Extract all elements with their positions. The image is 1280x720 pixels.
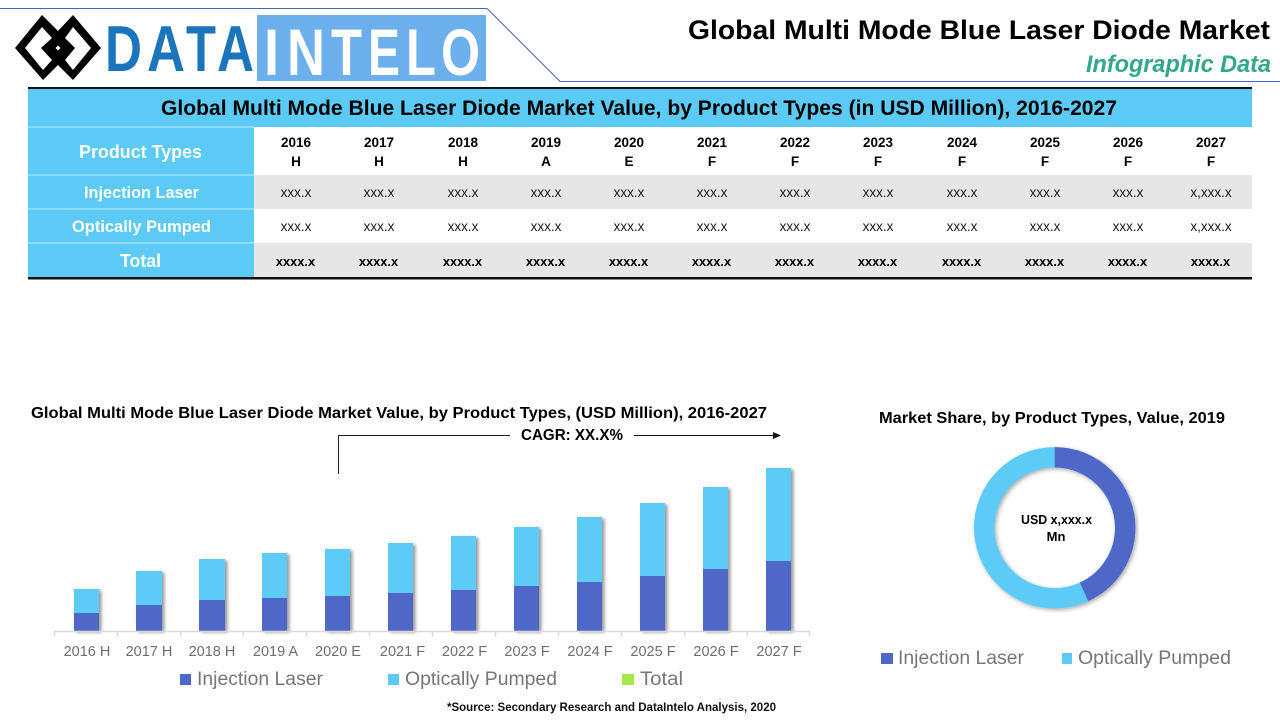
year header row: A [541, 154, 551, 169]
row label column [28, 126, 254, 278]
row values: Injection Laser: xxx.x [1030, 185, 1061, 200]
logo [15, 12, 486, 89]
year header row: 2027 [1196, 135, 1226, 150]
arrow: CAGR [634, 432, 781, 439]
row values: Total: xxxx.x [443, 254, 483, 269]
bar 2020 E [325, 549, 350, 631]
x axis labels: 2019 A [253, 644, 298, 660]
bar 2023 F [514, 527, 539, 631]
donut legend: Injection Laser [898, 648, 1025, 669]
bar 2019 A [262, 553, 287, 631]
bar 2018 H [199, 559, 225, 631]
logo word: INTELO: O [441, 15, 480, 89]
row values: Total: xxxx.x [609, 254, 649, 269]
row values: Total: xxxx.x [1191, 254, 1231, 269]
year header row: H [374, 154, 384, 169]
year header row: 2025 [1030, 135, 1061, 150]
bar chart legend: Optically Pumped [405, 669, 557, 690]
year header row: H [291, 154, 301, 169]
row values: Injection Laser: xxx.x [614, 185, 645, 200]
year header row: F [791, 154, 799, 169]
year header row: F [1041, 154, 1049, 169]
year header row: F [874, 154, 882, 169]
row values: Total: xxxx.x [1025, 254, 1065, 269]
row values: Total [276, 254, 1231, 269]
logo word: DATA [105, 12, 254, 85]
row values: Total: xxxx.x [359, 254, 399, 269]
donut legend: Optically Pumped [1078, 648, 1231, 669]
title: Global Multi Mode Blue Laser Diode Market [688, 15, 1270, 45]
row values: Optically Pumped: xxx.x [1030, 219, 1061, 234]
x axis labels: 2018 H [189, 644, 235, 660]
x axis labels: 2025 F [630, 644, 676, 660]
row values: Optically Pumped: xxx.x [614, 219, 645, 234]
logo box [257, 15, 486, 81]
year header row: 2026 [1113, 135, 1144, 150]
logo word: INTELO: T [331, 15, 362, 89]
year header row: 2022 [780, 135, 810, 150]
logo word: DATA: D [105, 12, 142, 85]
row label column: Injection Laser [84, 184, 200, 202]
x axis labels: 2016 H [64, 644, 110, 660]
logo word: INTELO: N [287, 15, 325, 89]
row values: Total: xxxx.x [692, 254, 732, 269]
subtitle: Infographic Data [1086, 51, 1271, 78]
row values: Optically Pumped: xxx.x [531, 219, 562, 234]
row values: Optically Pumped: xxx.x [863, 219, 894, 234]
row values: Injection Laser: xxx.x [531, 185, 562, 200]
year header row: 2017 [364, 135, 394, 150]
row values: Injection Laser: xxx.x [448, 185, 479, 200]
row label column: Product Types [79, 141, 202, 162]
row values: Total: xxxx.x [276, 254, 316, 269]
year header row: 2018 [448, 135, 479, 150]
source note: *Source: Secondary Research and DataIntelo Analysis, 2020 [447, 702, 776, 714]
row values: Total: xxxx.x [775, 254, 815, 269]
x axis labels: 2023 F [504, 644, 550, 660]
year header row: F [1207, 154, 1215, 169]
bar 2026 F [703, 487, 728, 631]
year header row: F [958, 154, 966, 169]
row values: Total: xxxx.x [858, 254, 898, 269]
table title: Global Multi Mode Blue Laser Diode Market Value, by Product Types (in USD Million), 2016-2027 [161, 96, 1117, 120]
row values: Total: xxxx.x [526, 254, 566, 269]
row values: Injection Laser: xxx.x [780, 185, 811, 200]
row values: Optically Pumped: xxx.x [780, 219, 811, 234]
row values: Total: xxxx.x [942, 254, 982, 269]
year header row [281, 135, 1226, 169]
year header row: H [458, 154, 468, 169]
x axis labels: 2021 F [380, 644, 425, 660]
donut ring [984, 457, 1125, 598]
logo word: INTELO [264, 15, 480, 89]
year header row: E [624, 154, 634, 169]
row values: Injection Laser: xxx.x [947, 185, 978, 200]
row values: Optically Pumped: xxx.x [364, 219, 395, 234]
row label column: Total [120, 250, 161, 271]
row values: Optically Pumped: xxx.x [281, 219, 312, 234]
CAGR callout [338, 427, 781, 474]
CAGR elbow line [338, 436, 510, 474]
icon: logo diamonds [15, 15, 101, 80]
row values: Injection Laser: xxx.x [1113, 185, 1144, 200]
table title band [28, 89, 1252, 127]
row values: Injection Laser: xxx.x [697, 185, 728, 200]
row values: Total: xxxx.x [1108, 254, 1148, 269]
x axis labels: 2026 F [693, 644, 739, 660]
row label column: Optically Pumped [72, 218, 211, 236]
donut centre value: Mn [1047, 529, 1065, 544]
donut legend [881, 648, 1231, 669]
bar 2016 H [74, 589, 99, 631]
x axis labels [64, 644, 802, 660]
donut chart [984, 457, 1125, 598]
year header row: 2019 [531, 135, 561, 150]
row values: Injection Laser [281, 185, 1232, 200]
table top rule [28, 87, 1252, 90]
bar 2027 F [766, 468, 791, 631]
row values: Optically Pumped: xxx.x [448, 219, 479, 234]
x axis [54, 632, 810, 636]
x axis labels: 2017 H [126, 644, 172, 660]
x axis labels: 2027 F [756, 644, 802, 660]
donut chart title: Market Share, by Product Types, Value, 2019 [879, 410, 1225, 427]
logo word: INTELO: L [406, 15, 436, 89]
bar 2025 F [640, 503, 665, 631]
bar chart legend: Total [640, 669, 683, 690]
row values: Optically Pumped [281, 219, 1232, 234]
stacked bar chart [54, 468, 810, 660]
year header row: 2020 [614, 135, 644, 150]
table bottom rule [28, 277, 1252, 280]
bar chart legend: Injection Laser [197, 669, 324, 690]
x axis labels: 2022 F [442, 644, 487, 660]
logo word: INTELO: E [368, 15, 400, 89]
year header row: F [708, 154, 716, 169]
row values: Optically Pumped: xxx.x [697, 219, 728, 234]
logo word: DATA: A [217, 12, 254, 85]
row values: Injection Laser: x,xxx.x [1190, 185, 1232, 200]
logo word: INTELO: I [264, 15, 279, 89]
row values: Injection Laser: xxx.x [281, 185, 312, 200]
row values: Injection Laser: xxx.x [364, 185, 395, 200]
row values: Optically Pumped: x,xxx.x [1190, 219, 1232, 234]
bar chart legend [180, 669, 683, 690]
year header row: 2023 [863, 135, 894, 150]
data table [28, 87, 1252, 280]
donut centre value [1021, 512, 1093, 544]
row values: Optically Pumped: xxx.x [1113, 219, 1144, 234]
bar 2021 F [388, 543, 413, 631]
logo word: DATA: A [147, 12, 185, 85]
year header row: F [1124, 154, 1132, 169]
CAGR label: CAGR: XX.X% [521, 427, 623, 444]
x axis labels: 2020 E [315, 644, 361, 660]
bar chart title: Global Multi Mode Blue Laser Diode Market Value, by Product Types, (USD Million), 2016-2027 [31, 405, 767, 422]
grey row backgrounds [254, 175, 1252, 277]
year header row: 2024 [947, 135, 978, 150]
year header row: 2016 [281, 135, 312, 150]
bar 2022 F [451, 536, 476, 631]
year header row: 2021 [697, 135, 728, 150]
header frame line [0, 8, 1280, 82]
row values: Optically Pumped: xxx.x [947, 219, 978, 234]
bar 2017 H [136, 571, 162, 631]
donut centre value: USD x,xxx.x [1021, 512, 1093, 527]
bar 2024 F [577, 517, 602, 631]
logo word: DATA: T [186, 12, 216, 85]
x axis labels: 2024 F [567, 644, 613, 660]
row values: Injection Laser: xxx.x [863, 185, 894, 200]
